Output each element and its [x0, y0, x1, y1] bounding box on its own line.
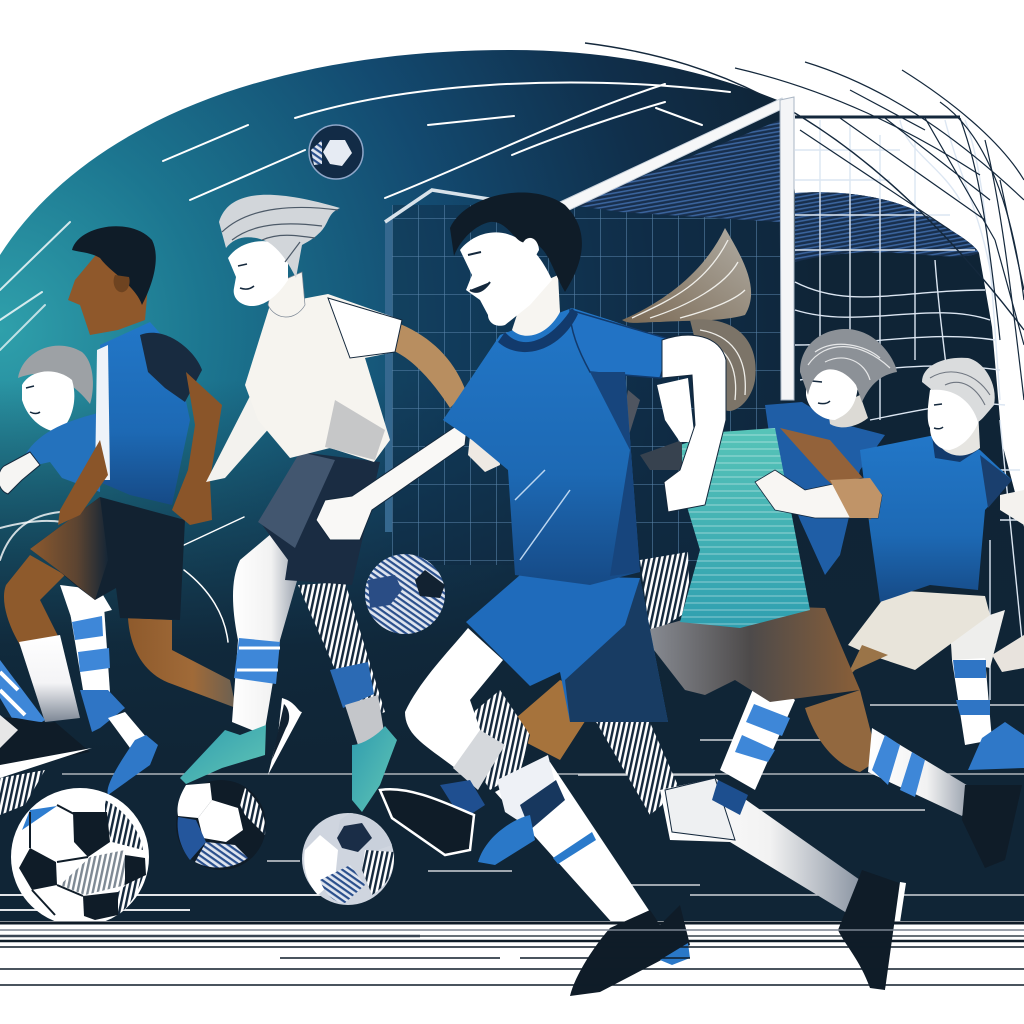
shorts	[640, 605, 860, 702]
front brown leg	[4, 555, 65, 645]
near arm	[206, 396, 272, 482]
far arm	[392, 322, 466, 408]
hair	[800, 329, 897, 402]
neck	[936, 410, 980, 456]
hair strands	[808, 344, 890, 380]
shirt	[95, 322, 190, 505]
black cleat outline	[268, 698, 302, 775]
soccer ball, blue hatching	[176, 780, 266, 870]
face	[806, 361, 858, 420]
ear	[522, 238, 539, 268]
neck	[828, 395, 868, 427]
hair strands	[222, 207, 338, 262]
face	[657, 378, 695, 442]
shorts	[466, 575, 668, 722]
black shoe	[838, 870, 905, 990]
hair strands	[930, 372, 990, 405]
teal shoe front	[180, 725, 266, 784]
black shoe front	[570, 905, 690, 996]
icon: soccer ball in the air	[309, 125, 363, 179]
front leg	[232, 528, 303, 735]
shirt	[245, 294, 402, 462]
soccer ball, shaded	[302, 813, 394, 905]
long hair strands	[618, 390, 640, 470]
sleeve	[140, 333, 202, 402]
large soccer ball	[12, 789, 148, 925]
long hair behind	[622, 228, 751, 323]
black cleat	[380, 789, 474, 855]
neck	[512, 275, 560, 336]
head	[68, 250, 150, 335]
shorts	[260, 452, 380, 585]
brown leg under main child	[502, 680, 600, 760]
black shoe right	[962, 785, 1022, 868]
rear leg with dark hatching	[595, 700, 680, 815]
face	[228, 241, 288, 306]
shirt	[860, 435, 1012, 602]
soccer ball on the dark field	[365, 554, 445, 634]
child with dark skin, blue shirt	[4, 226, 236, 795]
goal: roof mesh	[572, 118, 785, 222]
front leg brown	[805, 690, 878, 772]
shirt	[765, 402, 885, 575]
brown upper arm	[780, 428, 882, 520]
hair strands	[632, 240, 745, 400]
face	[928, 383, 982, 450]
arm right	[662, 335, 726, 512]
shirt	[680, 428, 810, 628]
right leg hand	[992, 635, 1024, 672]
front white sock	[19, 635, 80, 722]
child in teal shirt	[502, 228, 1022, 990]
collar	[498, 308, 578, 352]
child on the right in blue shirt	[845, 358, 1024, 770]
back leg with striped sock	[60, 585, 158, 795]
arm	[0, 452, 40, 494]
child at far left edge: leg and cleat	[0, 660, 92, 815]
far-left small child	[0, 346, 102, 494]
face	[22, 371, 74, 432]
child in the back, blue shirt, long hair	[765, 329, 897, 575]
shirt	[25, 412, 102, 492]
forearm and hand	[755, 470, 882, 518]
blue shoe	[968, 722, 1024, 770]
right arm	[1000, 490, 1024, 525]
arm front left	[316, 418, 468, 540]
child in white shirt	[180, 195, 466, 812]
rear brown leg	[128, 618, 236, 708]
goal: front post and crossbar	[560, 97, 794, 400]
face	[460, 232, 552, 326]
rear sock and shoe	[495, 762, 650, 926]
knee leg striped sock	[720, 672, 795, 790]
hair	[922, 358, 995, 422]
second fist	[468, 436, 500, 472]
main boy in blue	[316, 193, 726, 996]
arm	[172, 372, 222, 525]
rear leg shin	[465, 690, 530, 790]
motion lines in the sky	[0, 83, 730, 642]
far leg	[950, 610, 1005, 668]
blue toe shoe	[478, 815, 535, 865]
speed lines on white ground strip	[0, 923, 1024, 985]
white sock	[660, 778, 860, 915]
hair	[18, 346, 93, 404]
hair	[450, 193, 582, 292]
shorts	[848, 590, 990, 670]
teal shoe rear	[352, 726, 397, 812]
neck	[268, 272, 305, 317]
hair	[219, 195, 340, 278]
shorts	[30, 497, 185, 620]
front leg	[405, 628, 503, 768]
ground lines on dark field	[0, 705, 1024, 910]
shirt	[443, 308, 668, 585]
goal: right-side net	[585, 43, 1024, 700]
rear leg	[298, 582, 385, 722]
goal: back net grid	[385, 190, 782, 565]
shin and sock	[453, 730, 505, 790]
